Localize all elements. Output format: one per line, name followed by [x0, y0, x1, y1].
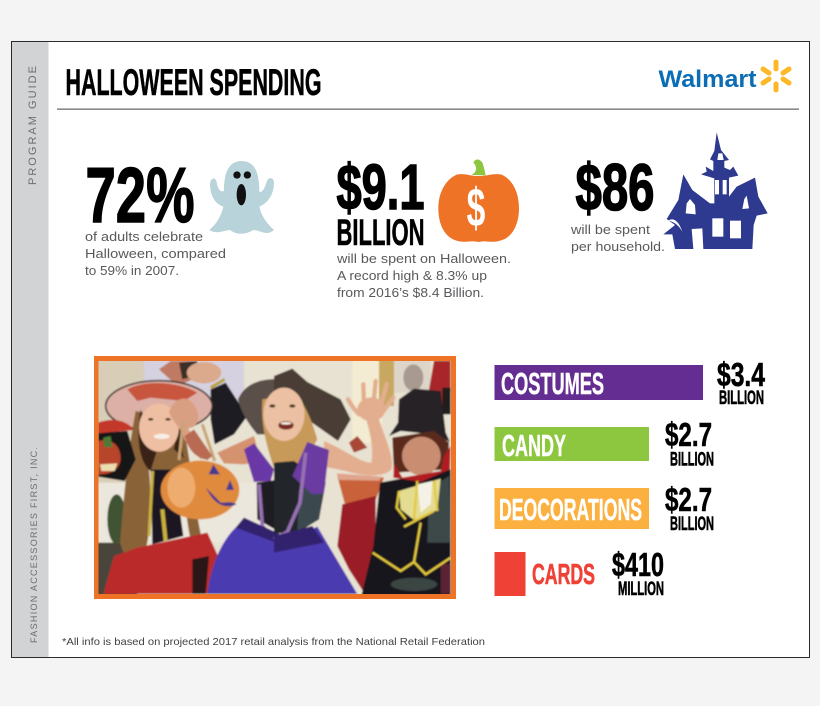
value: $2.7 billion: BILLION: [670, 450, 714, 470]
text: per household: will be spent: [570, 222, 650, 237]
sidebar: FASHION ACCESSORIES FIRST, INC.: [29, 447, 39, 643]
bar: decorations: [494, 481, 714, 535]
icon: haunted house: [663, 132, 768, 249]
bar: candy: CANDY: [502, 428, 566, 463]
value: $3.4 billion: [717, 356, 765, 409]
bar: costumes: COSTUMES: [501, 366, 604, 401]
photo: children in Halloween costumes: [90, 350, 460, 600]
text: per household: [570, 222, 665, 254]
icon: pumpkin: [438, 159, 519, 242]
value: $410 million: MILLION: [618, 579, 664, 600]
value: $2.7 billion: BILLION: [670, 514, 714, 535]
value: $3.4 billion: $3.4: [717, 356, 765, 393]
value: $410 million: [612, 546, 664, 600]
stat: $86 per household: [570, 132, 768, 254]
value: $410 million: $410: [612, 546, 664, 583]
bar: cards: CARDS: [532, 559, 595, 591]
text: record high: from 2016’s $8.4 Billion.: [337, 285, 484, 300]
text: record high: will be spent on Halloween.: [336, 251, 511, 266]
bar: cards: [494, 546, 664, 600]
value: $2.7 billion: [665, 416, 714, 470]
text: record high: A record high & 8.3% up: [337, 268, 487, 283]
icon: ghost: [209, 161, 274, 234]
stat: $9.1 billion: $9.1: [336, 151, 424, 223]
stat: 72% of adults: [85, 151, 274, 278]
stat: $86 per household: $86: [576, 150, 654, 224]
bar: costumes: [494, 356, 765, 409]
value: $3.4 billion: BILLION: [719, 388, 764, 409]
text: adults celebrate: to 59% in 2007.: [85, 263, 179, 278]
stat: $9.1 billion: BILLION: [336, 212, 424, 253]
text: record high: [336, 251, 511, 300]
bar: candy: [494, 416, 714, 470]
icon: pumpkin: $: [467, 178, 485, 239]
text: adults celebrate: [85, 229, 226, 278]
value: $2.7 billion: [665, 481, 714, 535]
stat: 72% of adults: 72%: [86, 151, 194, 239]
text: adults celebrate: Halloween, compared: [85, 246, 226, 261]
bar: decorations: DEOCORATIONS: [499, 492, 642, 527]
sidebar: [12, 42, 48, 657]
text: adults celebrate: of adults celebrate: [85, 229, 203, 244]
value: $2.7 billion: $2.7: [665, 416, 712, 453]
title: HALLOWEEN SPENDING: [66, 62, 322, 103]
logo: Walmart: Walmart: [658, 66, 757, 93]
logo: Walmart: [658, 62, 789, 93]
value: $2.7 billion: $2.7: [665, 481, 712, 518]
sidebar: PROGRAM GUIDE: [27, 66, 39, 185]
footnote: *All info is based on projected 2017 retail analysis from the National Retail Federation: [62, 636, 485, 648]
text: per household: per household.: [571, 239, 665, 254]
stat: $9.1 billion: [336, 151, 519, 300]
